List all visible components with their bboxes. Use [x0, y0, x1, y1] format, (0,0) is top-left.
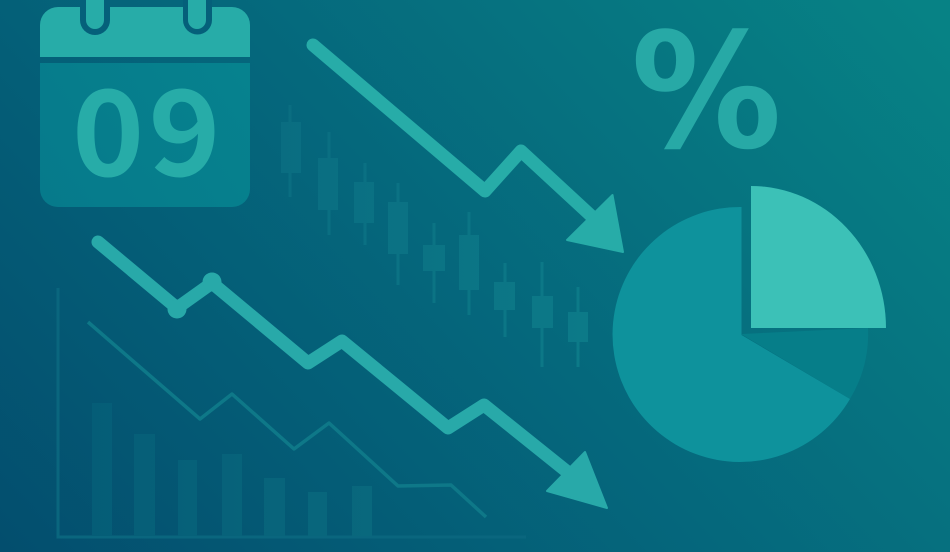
pie chart	[613, 186, 886, 462]
thin trend line	[88, 322, 486, 517]
bar chart	[92, 403, 372, 536]
arrow: lower falling trend	[98, 242, 607, 508]
arrow: upper falling trend	[313, 45, 623, 252]
calendar body	[40, 63, 250, 207]
calendar date: 09	[72, 38, 225, 210]
candlestick chart	[281, 105, 588, 367]
calendar rings	[80, 0, 212, 35]
pie slice: small dark	[741, 328, 868, 399]
pie slice: large	[613, 207, 850, 462]
percent symbol: %	[631, 0, 782, 185]
chart axes	[58, 288, 526, 537]
calendar header	[40, 7, 250, 57]
trend markers	[168, 272, 222, 318]
pie slice: highlight	[751, 186, 886, 328]
icon: calendar	[40, 0, 250, 210]
arrowhead	[547, 452, 607, 508]
